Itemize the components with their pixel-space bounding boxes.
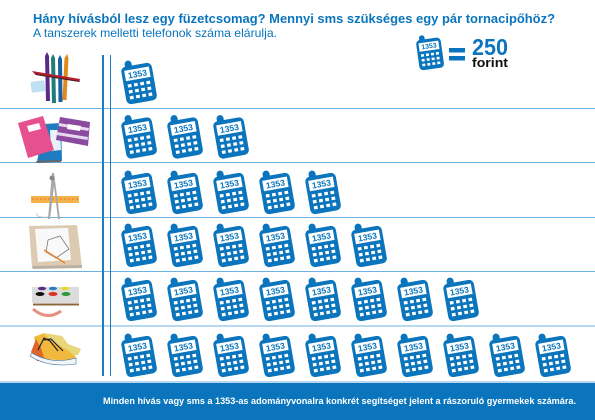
chart: row 4 phones: 1353	[311, 230, 332, 244]
chart: row 5 phones: 1353	[449, 284, 470, 298]
chart: row 4 phones: 1353	[219, 230, 240, 244]
icon: legend phone: 1353	[421, 42, 437, 51]
chart: row 1 phones	[120, 57, 158, 105]
chart: row 2 phones: 1353	[127, 122, 148, 135]
icon: pencils	[30, 52, 80, 103]
chart: row 6 phones: 1353	[495, 340, 516, 354]
legend: one phone equals 250 forint	[415, 33, 509, 71]
chart: row 4 phones: 1353	[127, 230, 148, 244]
chart: row 6 phones: 1353	[173, 340, 194, 354]
chart: row 5 phones: 1353	[173, 284, 194, 298]
chart: row 4 phones	[120, 220, 388, 268]
subtitle: A tanszerek melletti telefonok száma elárulja.	[33, 26, 277, 40]
chart: row 6 phones: 1353	[357, 340, 378, 354]
chart: row 3 phones: 1353	[265, 177, 286, 191]
icon: notebooks	[18, 116, 90, 163]
icon: paint palette	[32, 287, 79, 316]
footer text: Minden hívás vagy sms a 1353-as adományvonalra konkrét segítséget jelent a rászoruló gyermekek számára.	[103, 396, 576, 406]
chart: row 3 phones: 1353	[173, 177, 194, 191]
icon: compass and ruler	[31, 173, 79, 219]
equals sign	[449, 48, 465, 60]
chart: row 3 phones: 1353	[311, 177, 332, 191]
chart: row 2 phones: 1353	[219, 122, 240, 135]
chart: row 5 phones: 1353	[311, 284, 332, 298]
chart: row 5 phones	[120, 274, 480, 322]
chart: row 6 phones	[120, 330, 572, 378]
chart: row 3 phones: 1353	[219, 177, 240, 191]
footer band	[0, 383, 595, 420]
legend value: 250	[472, 34, 508, 60]
chart: row 3 phones	[120, 167, 342, 215]
legend unit: forint	[472, 55, 509, 70]
chart: row 2 phones: 1353	[173, 122, 194, 135]
chart: row 6 phones: 1353	[219, 340, 240, 354]
chart: row 2 phones	[120, 111, 250, 159]
chart: row 5 phones: 1353	[219, 284, 240, 298]
title: Hány hívásból lesz egy füzetcsomag? Mennyi sms szükséges egy pár tornacipőhöz?	[33, 11, 555, 26]
icon: drawing board	[29, 225, 82, 269]
chart: row 5 phones: 1353	[357, 284, 378, 298]
chart: row 6 phones: 1353	[265, 340, 286, 354]
chart: row 6 phones: 1353	[403, 340, 424, 354]
chart: row 1 phones: 1353	[127, 67, 148, 81]
chart: row 6 phones: 1353	[449, 340, 470, 354]
chart: row 4 phones: 1353	[265, 230, 286, 244]
icon: sneakers	[30, 333, 81, 365]
chart: row 5 phones: 1353	[265, 284, 286, 298]
chart: row 5 phones: 1353	[127, 284, 148, 298]
chart: row 4 phones: 1353	[173, 230, 194, 244]
chart: row 6 phones: 1353	[311, 340, 332, 354]
chart: row 6 phones: 1353	[127, 340, 148, 354]
chart: row 3 phones: 1353	[127, 177, 148, 191]
chart: row 6 phones: 1353	[541, 340, 562, 354]
chart: row 5 phones: 1353	[403, 284, 424, 298]
chart: row 4 phones: 1353	[357, 230, 378, 244]
